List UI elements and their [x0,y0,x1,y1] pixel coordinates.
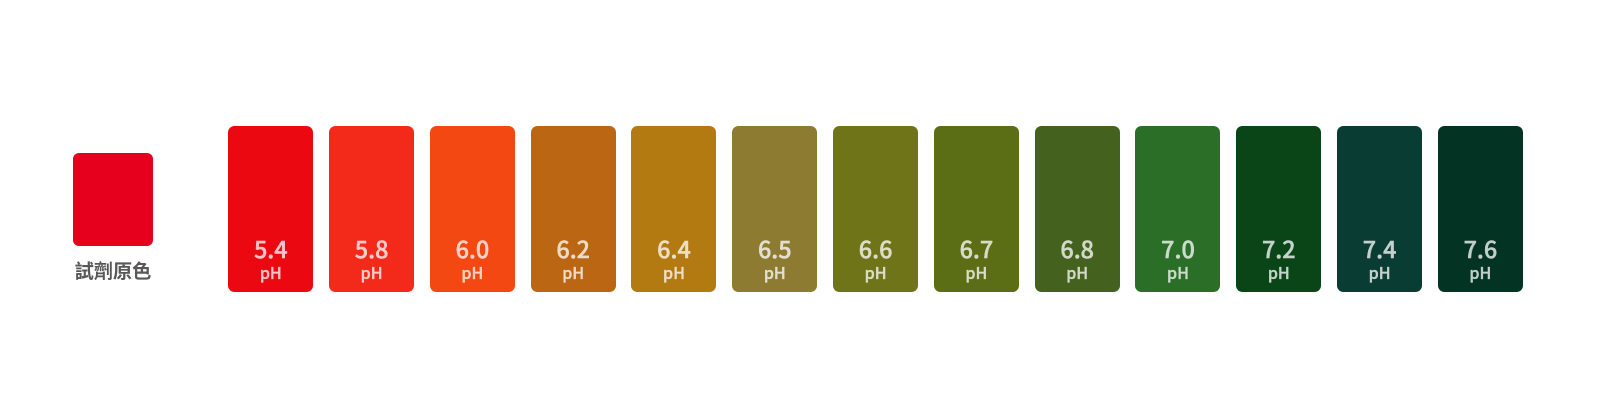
card: pH 6.6 [833,126,918,292]
card: pH 6.5: pH [764,260,786,284]
card: pH 7.0: 7.0 [1161,231,1195,265]
card: pH 6.7 [934,126,1019,292]
card: pH 7.0: pH [1167,260,1189,284]
card: pH 6.6: pH [865,260,887,284]
card: pH 6.4: 6.4 [657,231,691,265]
card: pH 6.2: 6.2 [556,231,590,265]
card: pH 5.4 [228,126,313,292]
card: pH 6.8: 6.8 [1060,231,1094,265]
card: pH 6.8 [1035,126,1120,292]
card: pH 5.4: 5.4 [254,231,288,265]
card: pH 7.4: pH [1369,260,1391,284]
pH colour scale [228,126,1523,292]
card: pH 7.6 [1438,126,1523,292]
card: pH 6.4 [631,126,716,292]
card: pH 7.2: pH [1268,260,1290,284]
card: pH 6.5: 6.5 [758,231,792,265]
card: pH 5.4: pH [260,260,282,284]
card: pH 6.5 [732,126,817,292]
card: pH 6.0: pH [461,260,483,284]
card: pH 6.4: pH [663,260,685,284]
card: pH 6.2: pH [562,260,584,284]
card: pH 6.8: pH [1066,260,1088,284]
card: pH 7.6: pH [1469,260,1491,284]
card: pH 6.7: pH [965,260,987,284]
card: pH 5.8 [329,126,414,292]
card: pH 5.8: pH [361,260,383,284]
card: pH 6.0 [430,126,515,292]
card: pH 6.6: 6.6 [859,231,892,265]
card: pH 6.2 [531,126,616,292]
card: pH 7.4 [1337,126,1422,292]
card: pH 7.2: 7.2 [1262,231,1296,265]
card: pH 6.0: 6.0 [456,231,489,265]
reagent original colour swatch [73,153,153,246]
card: pH 7.6: 7.6 [1464,231,1497,265]
card: pH 6.7: 6.7 [960,231,993,265]
card: pH 7.0 [1135,126,1220,292]
reagent label: 試劑原色 [75,256,151,284]
card: pH 5.8: 5.8 [355,231,388,265]
card: pH 7.4: 7.4 [1363,231,1396,265]
card: pH 7.2 [1236,126,1321,292]
